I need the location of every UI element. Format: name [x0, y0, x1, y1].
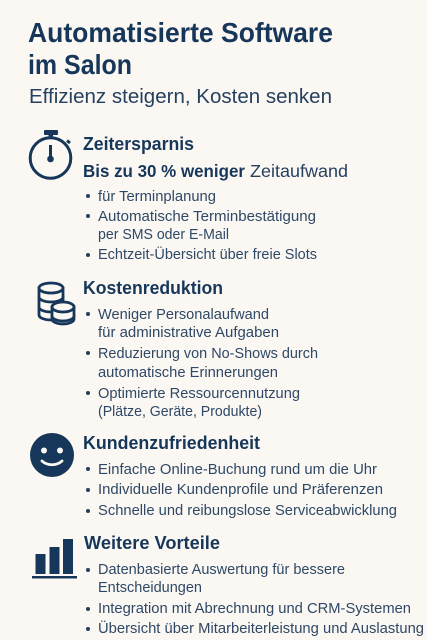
bullet list: Kostenreduktion: Weniger Personalaufwand: [98, 306, 269, 323]
icon: smiley: [30, 433, 74, 477]
bullet list: Weitere Vorteile: Entscheidungen: [98, 579, 202, 596]
bullet list: Zeitersparnis: per SMS oder E-Mail: [98, 226, 229, 243]
bullet list: Kostenreduktion: Optimierte Ressourcennutzung: [98, 385, 300, 402]
title: im Salon: [28, 49, 132, 80]
key figure: 30 percent: Zeitaufwand: [250, 161, 348, 181]
bullet list: Kostenreduktion: [86, 306, 318, 420]
heading: Zeitersparnis: Zeitersparnis: [83, 133, 194, 154]
bullet list: Weitere Vorteile: [86, 561, 424, 637]
key figure: 30 percent: Bis zu 30 % weniger: [83, 161, 245, 181]
bullet list: Kostenreduktion: automatische Erinnerungen: [98, 364, 278, 381]
subtitle: Effizienz steigern, Kosten senken: [29, 85, 332, 108]
panel: Kostenreduktion: [39, 277, 318, 420]
bullet list: Kundenzufriedenheit: [86, 461, 397, 519]
heading: Kostenreduktion: Kostenreduktion: [83, 277, 223, 298]
bullet list: Kundenzufriedenheit: Schnelle und reibungslose Serviceabwicklung: [98, 502, 397, 519]
bullet list: Zeitersparnis: für Terminplanung: [98, 188, 216, 205]
icon: stopwatch: [30, 130, 71, 178]
bullet list: Kundenzufriedenheit: Individuelle Kundenprofile und Präferenzen: [98, 481, 383, 498]
key figure: 30 percent: [83, 161, 348, 181]
bullet list: Kostenreduktion: für administrative Aufgaben: [98, 324, 279, 341]
bullet list: Zeitersparnis: [86, 188, 317, 263]
title: Automatisierte Software: [28, 17, 333, 48]
panel: Zeitersparnis: [30, 130, 348, 263]
bullet list: Weitere Vorteile: Integration mit Abrechnung und CRM-Systemen: [98, 600, 411, 617]
panel: Weitere Vorteile: [32, 532, 424, 637]
panel: Kundenzufriedenheit: [30, 432, 397, 519]
bullet list: Weitere Vorteile: Übersicht über Mitarbeiterleistung und Auslastung: [98, 619, 424, 637]
bullet list: Kostenreduktion: (Plätze, Geräte, Produkte): [98, 403, 262, 420]
heading: Kundenzufriedenheit: Kundenzufriedenheit: [83, 432, 260, 453]
bullet list: Zeitersparnis: Echtzeit-Übersicht über freie Slots: [98, 245, 317, 263]
icon: bar chart: [32, 539, 77, 578]
bullet list: Kundenzufriedenheit: Einfache Online-Buchung rund um die Uhr: [98, 461, 377, 478]
icon: coin stacks: [39, 283, 74, 324]
bullet list: Weitere Vorteile: Datenbasierte Auswertung für bessere: [98, 561, 345, 578]
bullet list: Zeitersparnis: Automatische Terminbestätigung: [98, 208, 316, 225]
title: [28, 17, 333, 80]
bullet list: Kostenreduktion: Reduzierung von No-Shows durch: [98, 345, 318, 362]
heading: Weitere Vorteile: Weitere Vorteile: [84, 532, 220, 553]
